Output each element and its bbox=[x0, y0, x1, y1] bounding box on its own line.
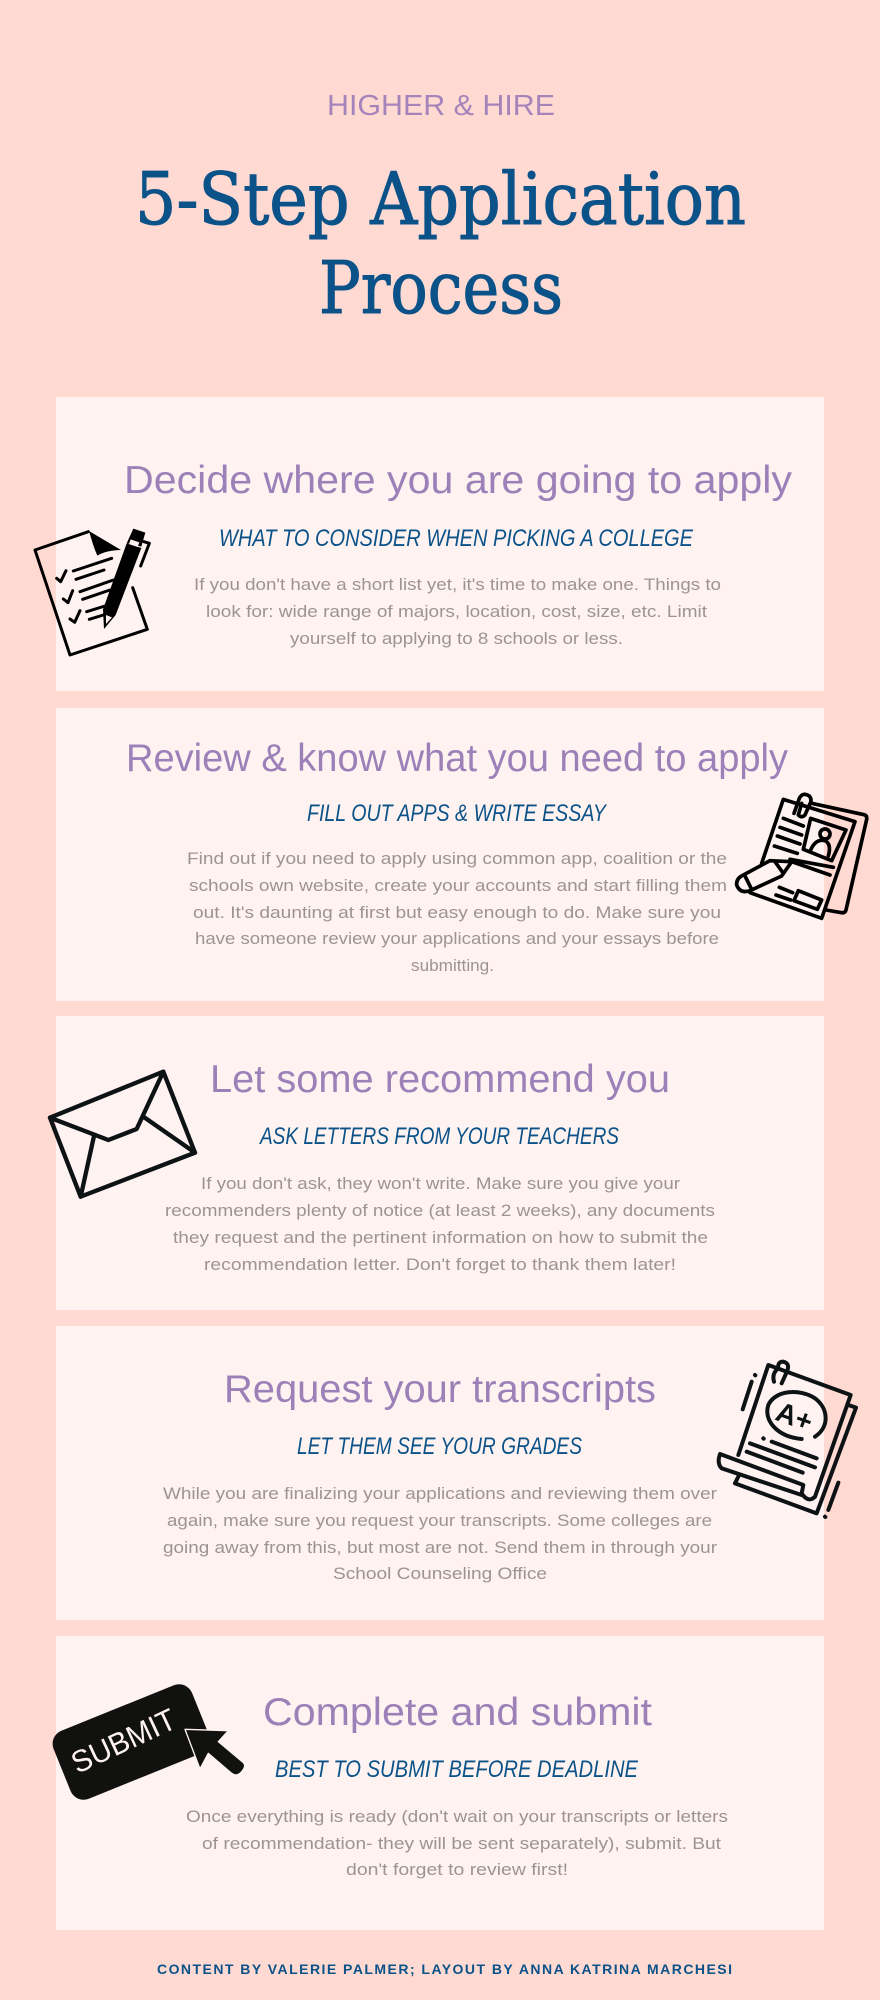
heading: step 3: Let some recommend you bbox=[210, 1058, 670, 1101]
body text: step 2: submitting. bbox=[411, 956, 494, 975]
panel: step 3 recommendations bbox=[50, 1016, 824, 1310]
icon: checklist and pen bbox=[35, 529, 149, 655]
body text: step 1: look for: wide range of majors, location, cost, size, etc. Limit bbox=[206, 602, 707, 621]
body text: step 5: of recommendation- they will be sent separately), submit. But bbox=[202, 1834, 721, 1853]
body text: step 1 bbox=[194, 575, 721, 648]
body text: step 4 bbox=[163, 1484, 717, 1583]
body text: step 1: If you don't have a short list yet, it's time to make one. Things to bbox=[194, 575, 721, 594]
body text: step 2: have someone review your applications and your essays before bbox=[195, 929, 719, 948]
panel: step 4 transcripts bbox=[56, 1326, 856, 1620]
heading: step 4: Request your transcripts bbox=[224, 1368, 656, 1411]
body text: step 2: schools own website, create your accounts and start filling them bbox=[189, 876, 727, 895]
body text: step 3: recommenders plenty of notice (at least 2 weeks), any documents bbox=[165, 1201, 715, 1220]
body text: step 4: School Counseling Office bbox=[333, 1564, 547, 1583]
body text: step 4: going away from this, but most are not. Send them in through your bbox=[163, 1538, 717, 1557]
panel: step 1 decide where to apply bbox=[35, 397, 824, 691]
subheading: step 2: FILL OUT APPS & WRITE ESSAY bbox=[307, 800, 608, 827]
body text: step 1: yourself to applying to 8 schools or less. bbox=[290, 629, 623, 648]
icon: graded paper A+ bbox=[719, 1362, 856, 1517]
heading: step 5: Complete and submit bbox=[263, 1691, 652, 1734]
body text: step 5: Once everything is ready (don't wait on your transcripts or letters bbox=[186, 1807, 728, 1826]
body text: step 4: again, make sure you request your transcripts. Some colleges are bbox=[167, 1511, 712, 1530]
body text: step 2 bbox=[187, 849, 727, 975]
brand label: HIGHER & HIRE bbox=[327, 90, 555, 122]
icon: graded paper A+: A+ bbox=[772, 1396, 817, 1437]
body text: step 4: While you are finalizing your applications and reviewing them over bbox=[163, 1484, 717, 1503]
icon: submit button and cursor: SUBMIT bbox=[66, 1702, 182, 1780]
icon: envelope bbox=[50, 1072, 195, 1197]
panel: step 5 complete and submit bbox=[48, 1636, 824, 1930]
body text: step 3: recommendation letter. Don't forget to thank them later! bbox=[204, 1255, 676, 1274]
body text: step 5: don't forget to review first! bbox=[346, 1860, 568, 1879]
panel: step 2 review and apply bbox=[56, 708, 867, 1001]
heading: step 1: Decide where you are going to apply bbox=[124, 459, 793, 502]
icon: submit button and cursor bbox=[48, 1680, 245, 1804]
subheading: step 1: WHAT TO CONSIDER WHEN PICKING A COLLEGE bbox=[219, 525, 694, 552]
body text: step 3: they request and the pertinent information on how to submit the bbox=[173, 1228, 708, 1247]
title: Process bbox=[319, 246, 563, 330]
body text: step 3 bbox=[165, 1174, 715, 1274]
subheading: step 3: ASK LETTERS FROM YOUR TEACHERS bbox=[258, 1123, 619, 1150]
heading: step 2: Review & know what you need to apply bbox=[126, 737, 788, 780]
body text: step 2: Find out if you need to apply using common app, coalition or the bbox=[187, 849, 727, 868]
title bbox=[135, 157, 746, 330]
title: 5-Step Application bbox=[135, 157, 746, 241]
footer credit: CONTENT BY VALERIE PALMER; LAYOUT BY ANNA KATRINA MARCHESI bbox=[157, 1961, 732, 1977]
body text: step 2: out. It's daunting at first but easy enough to do. Make sure you bbox=[193, 903, 721, 922]
body text: step 3: If you don't ask, they won't write. Make sure you give your bbox=[201, 1174, 680, 1193]
icon: application form and pencil bbox=[737, 794, 867, 918]
subheading: step 4: LET THEM SEE YOUR GRADES bbox=[297, 1433, 582, 1460]
body text: step 5 bbox=[186, 1807, 728, 1879]
subheading: step 5: BEST TO SUBMIT BEFORE DEADLINE bbox=[275, 1756, 639, 1783]
